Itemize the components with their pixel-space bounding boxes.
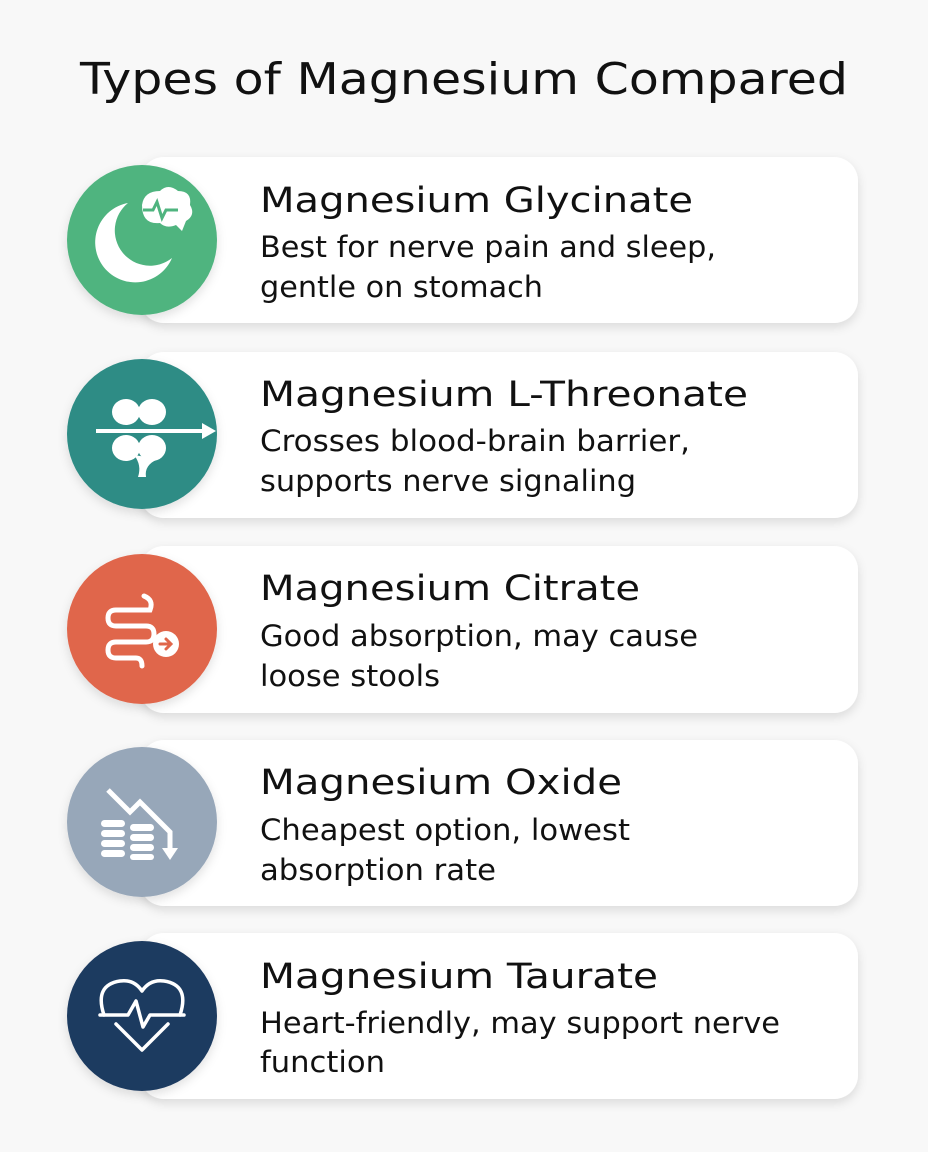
text: threonate: Crosses blood-brain barrier,: [260, 424, 690, 458]
heading: glycinate: Magnesium Glycinate: [260, 181, 693, 221]
text: glycinate: gentle on stomach: [260, 270, 543, 304]
text: threonate: supports nerve signaling: [260, 464, 636, 498]
text: taurate: function: [260, 1045, 385, 1079]
panel: taurate: [67, 933, 858, 1099]
heading: threonate: Magnesium L-Threonate: [260, 375, 748, 415]
icon: coins and down arrow: [101, 790, 178, 860]
heading: oxide: Magnesium Oxide: [260, 763, 622, 803]
icon: moon and brain: [95, 187, 192, 282]
panel: citrate: [67, 546, 858, 713]
title: Types of Magnesium Compared: [79, 54, 848, 105]
text: citrate: Good absorption, may cause: [260, 619, 698, 653]
icon: heart with pulse: [100, 981, 184, 1050]
panel: threonate: [67, 352, 858, 518]
text: taurate: Heart-friendly, may support nerve: [260, 1006, 780, 1040]
text: glycinate: Best for nerve pain and sleep,: [260, 230, 716, 264]
panel: oxide: [67, 740, 858, 906]
heading: citrate: Magnesium Citrate: [260, 569, 640, 609]
text: oxide: Cheapest option, lowest: [260, 813, 630, 847]
icon: intestine: [108, 596, 179, 666]
heading: taurate: Magnesium Taurate: [260, 957, 658, 997]
icon: brain with arrow: [96, 399, 216, 477]
text: citrate: loose stools: [260, 659, 440, 693]
panel: glycinate: [67, 157, 858, 323]
text: oxide: absorption rate: [260, 853, 496, 887]
